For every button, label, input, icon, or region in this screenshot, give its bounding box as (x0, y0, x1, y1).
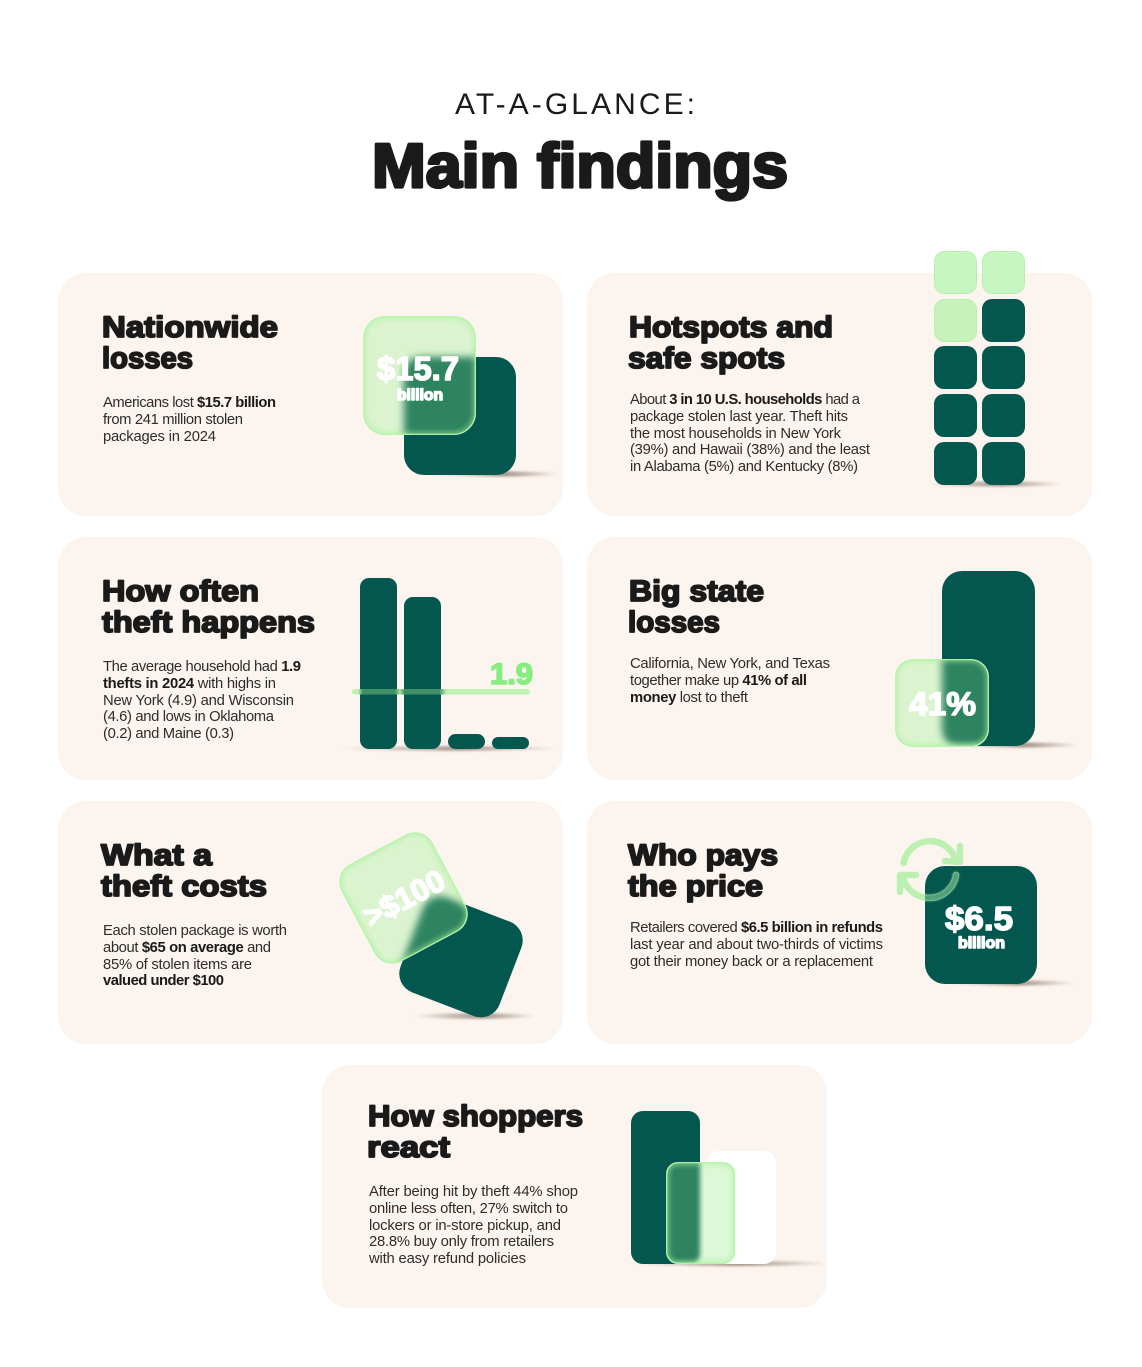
card background (587, 537, 1092, 780)
eyebrow heading: AT-A-GLANCE: (455, 88, 695, 121)
heading: theft happens (102, 606, 315, 639)
body text: Each stolen package is worth (103, 923, 287, 939)
body text: New York (4.9) and Wisconsin (103, 693, 294, 709)
heading: What a (101, 839, 212, 872)
body text: (0.2) and Maine (0.3) (103, 726, 234, 742)
graphic: glass card over dark square with $15.7 billion: $15.7 (377, 350, 459, 387)
graphic: dark square with $6.5 billion: billion (958, 935, 1005, 952)
panel: hotspots and safe spots (587, 252, 1092, 516)
body text: 85% of stolen items are (103, 957, 252, 973)
graphic: 3 in 10 square grid (927, 252, 1063, 487)
panel: nationwide losses (58, 273, 563, 516)
heading: Who pays (628, 839, 778, 872)
body text: got their money back or a replacement (630, 954, 873, 970)
graphic: dark square with $6.5 billion (925, 866, 1076, 986)
body text: online less often, 27% switch to (369, 1201, 568, 1217)
body text (103, 923, 287, 989)
body text: package stolen last year. Theft hits (630, 409, 848, 425)
graphic: glass card over dark square with $15.7 billion: billion (397, 387, 443, 404)
panel: what a theft costs (58, 801, 563, 1044)
body text: last year and about two-thirds of victims (630, 937, 883, 953)
heading: losses (628, 606, 720, 639)
graphic: dark square with $6.5 billion: $6.5 (945, 900, 1013, 937)
body text: Americans lost $15.7 billion (103, 395, 276, 411)
icon: refresh arrows (900, 841, 960, 898)
heading (102, 311, 278, 375)
card background (587, 801, 1092, 1044)
body text: together make up 41% of all (630, 673, 807, 689)
title: Main findings (372, 132, 788, 201)
body text: The average household had 1.9 (103, 659, 301, 675)
body text (630, 656, 830, 706)
body text: about $65 on average and (103, 940, 271, 956)
heading: safe spots (628, 342, 785, 375)
body text: About 3 in 10 U.S. households had a (630, 392, 861, 408)
heading (367, 1100, 583, 1164)
body text: packages in 2024 (103, 429, 216, 445)
body text: money lost to theft (630, 690, 748, 706)
body text: 28.8% buy only from retailers (369, 1234, 554, 1250)
body text (103, 395, 276, 445)
graphic: tilted glass card over dark square with >$100 (339, 832, 531, 1020)
body text: After being hit by theft 44% shop (369, 1184, 578, 1200)
bar chart with average line (340, 578, 560, 751)
heading: theft costs (101, 870, 267, 903)
body text: in Alabama (5%) and Kentucky (8%) (630, 459, 858, 475)
body text: lockers or in-store pickup, and (369, 1218, 561, 1234)
body text: California, New York, and Texas (630, 656, 830, 672)
heading: the price (628, 870, 763, 903)
graphic: glass card over tall bar with 41% (895, 571, 1080, 748)
heading: Hotspots and (629, 311, 833, 344)
heading: react (367, 1131, 450, 1164)
heading: losses (102, 342, 193, 375)
card background (322, 1065, 827, 1308)
card background (58, 801, 563, 1044)
body text: thefts in 2024 with highs in (103, 676, 276, 692)
panel: who pays the price (587, 801, 1092, 1044)
body text: the most households in New York (630, 426, 842, 442)
card background (58, 273, 563, 516)
graphic: tilted glass card over dark square with >$100: >$100 (358, 863, 451, 934)
heading: How shoppers (368, 1100, 583, 1133)
card background (587, 273, 1092, 516)
body text: Retailers covered $6.5 billion in refunds (630, 920, 883, 936)
body text: valued under $100 (103, 973, 224, 989)
body text (630, 920, 883, 970)
card background (58, 537, 563, 780)
panel: how often theft happens (58, 537, 563, 780)
heading: Big state (629, 575, 764, 608)
heading: Nationwide (102, 311, 278, 344)
panel: how shoppers react (322, 1065, 830, 1308)
body text (630, 392, 870, 475)
heading (628, 575, 764, 639)
body text (368, 1184, 578, 1267)
body text: from 241 million stolen (103, 412, 243, 428)
heading (101, 839, 267, 903)
body text (103, 659, 301, 742)
body text: with easy refund policies (368, 1251, 526, 1267)
body text: (4.6) and lows in Oklahoma (103, 709, 275, 725)
panel: big state losses (587, 537, 1092, 780)
graphic: glass card over tall bar with 41%: 41% (909, 686, 976, 722)
heading: How often (102, 575, 259, 608)
average value label: 1.9 (490, 658, 533, 691)
heading (628, 311, 833, 375)
header (372, 88, 788, 201)
graphic: overlapping bars with glass bar (630, 1111, 830, 1266)
heading (102, 575, 315, 639)
graphic: glass card over dark square with $15.7 billion (363, 316, 560, 477)
heading (628, 839, 778, 903)
body text: (39%) and Hawaii (38%) and the least (630, 442, 870, 458)
